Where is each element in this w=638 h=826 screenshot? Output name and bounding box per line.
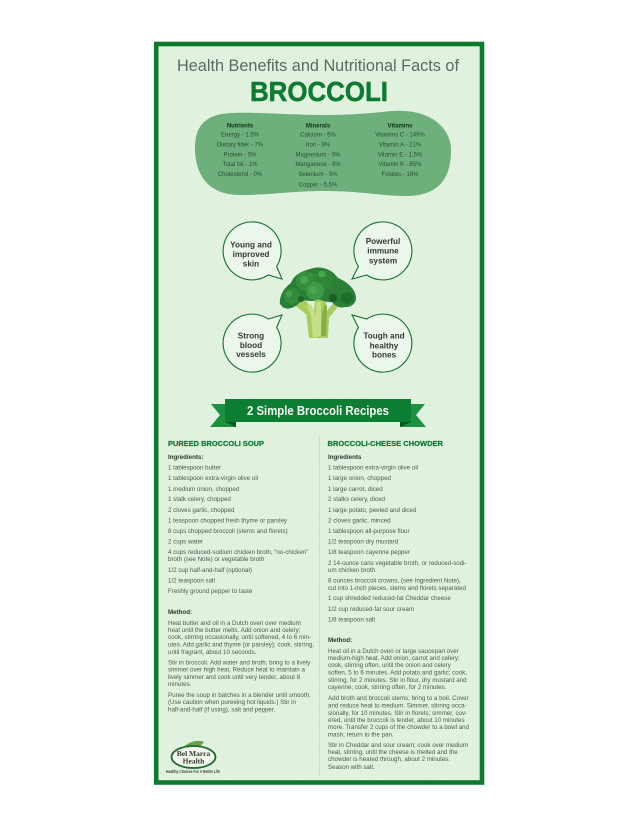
nutrients column: Protein - 5% [223, 152, 257, 158]
logo: Bel Marra Health: Healthy Choices For A Better Life [166, 769, 220, 774]
chowder ingredients: 1/8 teaspoon salt [328, 616, 375, 623]
chowder ingredients: 2 cloves garlic, minced [328, 517, 391, 524]
chowder method: chowder is heated through, about 2 minutes. [328, 756, 450, 763]
soup ingredients: Ingredients: [168, 454, 203, 461]
speech bubble: bones [352, 314, 412, 372]
vitamins column [375, 123, 425, 178]
speech bubble: skin [223, 222, 282, 280]
chowder ingredients: Ingredients [328, 454, 362, 461]
minerals column: Magnesium - 5% [295, 152, 341, 158]
logo: Bel Marra Health: Health [183, 756, 205, 766]
soup ingredients: 1 medium onion, chopped [168, 486, 240, 493]
speech bubble: bones: bones [372, 351, 396, 360]
nutrients column [217, 123, 264, 178]
logo: Bel Marra Health [166, 741, 220, 774]
soup method: cook, stirring occasionally, until softened, 4 to 6 min- [168, 634, 311, 641]
speech bubble: immune system: system [369, 256, 397, 265]
chowder ingredients: 1 tablespoon all-purpose flour [328, 528, 410, 535]
soup ingredients: 2 cloves garlic, chopped [168, 507, 235, 514]
soup method [168, 609, 314, 713]
chowder method: Stir in Cheddar and sour cream; cook over medium [328, 742, 468, 749]
soup method: heat until the butter melts. Add onion and celery; [168, 627, 301, 634]
speech bubble: blood vessels: Strong [238, 331, 264, 340]
chowder method: mash; return to the pan. [328, 731, 394, 738]
soup ingredients: 1/2 cup half-and-half (optional) [168, 567, 252, 574]
speech bubble: skin: improved [233, 250, 269, 259]
soup method: Puree the soup in batches in a blender until smooth. [168, 692, 311, 699]
chowder method [328, 637, 470, 771]
banner ribbon [210, 399, 426, 427]
speech bubble: blood vessels: vessels [236, 350, 266, 359]
chowder method: and reduce heat to medium. Simmer, stirring occa- [328, 702, 467, 710]
chowder ingredients: 1/8 teaspoon cayenne pepper [328, 549, 410, 556]
chowder method: Heat oil in a Dutch oven or large saucepan over [328, 648, 459, 655]
vitamins column: Vitamin E - 1.5% [378, 152, 423, 158]
chowder ingredients: 1 cup shredded reduced-fat Cheddar cheese [328, 595, 451, 602]
minerals column: Calcium - 5% [300, 133, 336, 139]
soup ingredients: 1 tablespoon extra-virgin olive oil [168, 475, 258, 482]
soup ingredients: 1 tablespoon butter [168, 464, 221, 472]
soup ingredients: Freshly ground pepper to taste [168, 588, 253, 595]
nutrients column: Nutrients [227, 123, 254, 129]
logo: Bel Marra Health: Bel Marra [177, 749, 211, 758]
chowder ingredients: 1 large potato, peeled and diced [328, 507, 417, 514]
nutrients column: Dietary fiber - 7% [217, 142, 264, 148]
chowder method: sionally, for 10 minutes. Stir in florets; simmer, cov- [328, 710, 467, 717]
soup method: half-and-half (if using), salt and pepper. [168, 706, 276, 713]
chowder ingredients: 1 large onion, chopped [328, 475, 392, 482]
heading: soup recipe: PUREED BROCCOLI SOUP [168, 439, 264, 448]
vitamins column: Folates - 16% [381, 172, 419, 178]
chowder method: medium-high heat. Add onion, carrot and celery; [328, 655, 460, 662]
chowder ingredients: 8 ounces broccoli crowns, (see Ingredient Note), [328, 577, 461, 584]
minerals column: Selenium - 5% [298, 172, 338, 178]
soup ingredients [168, 454, 308, 595]
soup ingredients: 1 teaspoon chopped fresh thyme or parsley [168, 517, 288, 524]
soup ingredients: 2 cups water [168, 538, 203, 545]
chowder method: ered, until the broccoli is tender, about 10 minutes [328, 717, 465, 724]
soup ingredients: broth (see Note) or vegetable broth [168, 556, 265, 563]
minerals column [295, 123, 341, 188]
minerals column: Minerals [306, 123, 331, 129]
speech bubble: immune system: immune [367, 247, 399, 256]
chowder ingredients: 1 large carrot, diced [328, 486, 383, 493]
vitamins column: Vitamin K - 85% [379, 162, 422, 168]
speech bubble: immune system: Powerful [366, 237, 400, 246]
nutrients column: Cholesterol - 0% [218, 172, 263, 178]
vitamins column: Vitamins [388, 123, 413, 129]
soup method: Method: [168, 609, 192, 616]
soup method: Stir in broccoli. Add water and broth; bring to a lively [168, 659, 311, 666]
chowder method: stirring, for 2 minutes. Stir in flour, dry mustard and [328, 677, 467, 684]
chowder method: soften, 5 to 6 minutes. Add potato and garlic; cook, [328, 669, 467, 676]
soup method: utes. Add garlic and thyme (or parsley); cook, stirring, [168, 641, 314, 648]
speech bubble: bones: Tough and [363, 332, 405, 341]
panel: nutrition facts blob [195, 111, 451, 196]
title line: Health Benefits and Nutritional Facts of [177, 57, 459, 75]
soup ingredients: 1/2 teaspoon salt [168, 577, 215, 584]
chowder ingredients: 1 tablespoon extra-virgin olive oil [328, 464, 418, 472]
minerals column: Copper - 5.5% [299, 182, 338, 188]
nutrients column: Energy - 1.5% [221, 133, 260, 139]
chowder ingredients: 2 stalks celery, diced [328, 496, 386, 503]
soup method: Heat butter and oil in a Dutch oven over medium [168, 620, 301, 627]
title: broccoli: BROCCOLI [250, 76, 388, 107]
soup ingredients: 4 cups reduced-sodium chicken broth, “no-chicken” [168, 549, 308, 556]
chowder ingredients: cut into 1-inch pieces, stems and florets separated [328, 585, 466, 592]
speech bubble: skin: Young and [230, 240, 272, 250]
speech bubble: blood vessels [223, 314, 282, 372]
column divider [318, 436, 320, 776]
chowder method: more. Transfer 2 cups of the chowder to a bowl and [328, 724, 470, 731]
vitamins column: Vitamins C - 149% [375, 133, 425, 139]
chowder method: cook, stirring often, until the onion and celery [328, 662, 452, 669]
speech bubble: blood vessels: blood [240, 341, 262, 350]
speech bubble: skin: skin [243, 260, 259, 269]
nutrients column: Total fat - 1% [222, 162, 258, 168]
speech bubble: bones: healthy [370, 341, 399, 350]
soup ingredients: 8 cups chopped broccoli (stems and florets) [168, 528, 288, 535]
heading: chowder recipe: BROCCOLI-CHEESE CHOWDER [328, 439, 444, 448]
chowder ingredients: 2 14-ounce cans vegetable broth, or reduced-sodi- [328, 560, 467, 567]
chowder method: heat, stirring, until the cheese is melted and the [328, 749, 458, 756]
banner ribbon: 2 Simple Broccoli Recipes [247, 403, 389, 418]
chowder method: cayenne; cook, stirring often, for 2 minutes. [328, 684, 447, 691]
chowder ingredients: um chicken broth [328, 567, 376, 574]
minerals column: Manganese - 9% [295, 162, 341, 168]
chowder ingredients [328, 454, 467, 623]
soup ingredients: 1 stalk celery, chopped [168, 496, 231, 503]
panel: infographic frame [156, 44, 482, 782]
speech bubble: immune system [352, 222, 412, 280]
chowder ingredients: 1/2 cup reduced-fat sour cream [328, 606, 414, 613]
soup method: (Use caution when pureeing hot liquids.) Stir in [168, 699, 297, 706]
icon: broccoli [280, 267, 356, 338]
minerals column: Iron - 9% [306, 142, 331, 148]
soup method: simmer over high heat. Reduce heat to maintain a [168, 666, 305, 674]
chowder method: Method: [328, 637, 352, 644]
chowder ingredients: 1/2 teaspoon dry mustard [328, 538, 399, 545]
soup method: minutes. [168, 681, 192, 688]
chowder method: Season with salt. [328, 764, 375, 771]
soup method: lively simmer and cook until very tender, about 8 [168, 674, 301, 681]
vitamins column: Vitamin A - 21% [379, 142, 422, 148]
soup method: until fragrant, about 10 seconds. [168, 649, 257, 656]
chowder method: Add broth and broccoli stems; bring to a boil. Cover [328, 695, 469, 702]
